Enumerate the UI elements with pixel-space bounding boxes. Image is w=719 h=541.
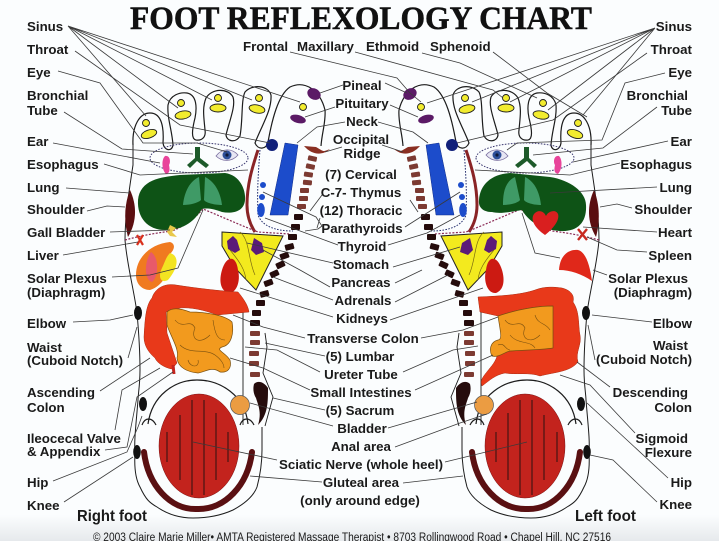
centre column labels: Small Intestines [310,385,412,400]
liver and solar plexus [136,242,177,290]
right column labels: Hip [671,475,692,490]
right column labels: Colon [654,400,692,415]
right column labels: Esophagus [620,157,692,172]
lung reflex area [479,173,586,231]
left column labels: Ascending [27,385,95,400]
right foot caption: Right foot [77,508,148,525]
centre column labels: Neck [346,114,378,129]
right column labels: Spleen [648,248,692,263]
right column labels: Elbow [653,316,693,331]
left column labels: Waist [27,340,63,355]
centre column labels: Pancreas [331,275,391,290]
top sinus labels: Frontal [243,39,288,54]
left column labels: Sinus [27,19,63,34]
ascending and transverse colon [144,285,249,369]
spleen marker X [578,229,587,240]
top sinus labels: Ethmoid [366,39,419,54]
left column labels: Eye [27,65,51,80]
centre column labels: Anal area [331,439,392,454]
left column labels: Liver [27,248,59,263]
right column labels: Bronchial [627,88,688,103]
left foot diagram [394,85,599,518]
right column labels: Sinus [656,19,692,34]
centre column labels: Sciatic Nerve (whole heel) [279,457,443,472]
right column labels: Lung [660,180,692,195]
centre column labels [279,78,443,508]
centre column labels: Pineal [342,78,382,93]
left column labels: Shoulder [27,202,85,217]
left column labels: Gall Bladder [27,225,105,240]
top sinus labels [243,39,491,54]
gall bladder marker [167,225,177,237]
centre column labels: Adrenals [335,293,391,308]
left column labels: Solar Plexus [27,271,107,286]
right column labels: Eye [668,65,692,80]
liver marker X [137,235,143,245]
right column labels: (Cuboid Notch) [596,352,692,367]
centre column labels: Kidneys [336,311,388,326]
left column labels: Tube [27,103,58,118]
transverse, descending and sigmoid colon [478,287,580,386]
right column labels: Shoulder [634,202,692,217]
right column labels: Heart [658,225,693,240]
right column labels: Descending [613,385,688,400]
centre column labels: Gluteal area [323,475,400,490]
top sinus labels: Maxillary [297,39,355,54]
right column labels: Knee [659,497,692,512]
small intestines [490,306,553,356]
centre column labels: Ridge [344,146,380,161]
left column labels: Throat [27,42,69,57]
centre column labels: Thyroid [338,239,386,254]
left column labels [27,19,123,513]
centre column labels: Pituitary [335,96,389,111]
title: FOOT REFLEXOLOGY CHART [130,1,592,37]
left column labels: Esophagus [27,157,99,172]
right foot diagram [125,85,330,518]
right column labels: Ear [671,134,692,149]
left column labels: Ileocecal Valve [27,431,121,446]
centre column labels: (only around edge) [300,493,420,508]
right column labels: Flexure [645,445,692,460]
spleen [559,250,592,281]
centre column labels: C-7- Thymus [321,185,401,200]
right column labels: Sigmoid [636,431,688,446]
left column labels: (Diaphragm) [27,285,105,300]
right column labels: (Diaphragm) [614,285,692,300]
right column labels [596,19,693,512]
leader lines [53,26,668,502]
top sinus labels: Sphenoid [430,39,491,54]
stomach, pancreas, kidney [220,232,283,293]
left column labels: (Cuboid Notch) [27,353,123,368]
centre column labels: (5) Sacrum [326,403,394,418]
left foot caption: Left foot [575,508,637,525]
left column labels: Knee [27,498,60,513]
right column labels: Solar Plexus [608,271,688,286]
centre column labels: (7) Cervical [325,167,397,182]
left column labels: Bronchial [27,88,88,103]
centre column labels: Transverse Colon [307,331,419,346]
centre column labels: Stomach [333,257,389,272]
right column labels: Throat [651,42,693,57]
lung reflex area [138,173,245,230]
right column labels: Waist [653,338,689,353]
left column labels: Ear [27,134,48,149]
heart [533,211,558,235]
centre column labels: Ureter Tube [324,367,398,382]
centre column labels: Parathyroids [321,221,403,236]
right column labels: Tube [661,103,692,118]
left column labels: Lung [27,180,60,195]
centre column labels: (5) Lumbar [326,349,394,364]
centre column labels: Occipital [333,132,389,147]
small intestines [167,309,233,373]
stomach, pancreas, kidney [441,232,504,293]
left column labels: & Appendix [27,444,101,459]
centre column labels: (12) Thoracic [320,203,402,218]
centre column labels: Bladder [337,421,387,436]
left column labels: Colon [27,400,65,415]
left column labels: Elbow [27,316,67,331]
left column labels: Hip [27,475,48,490]
